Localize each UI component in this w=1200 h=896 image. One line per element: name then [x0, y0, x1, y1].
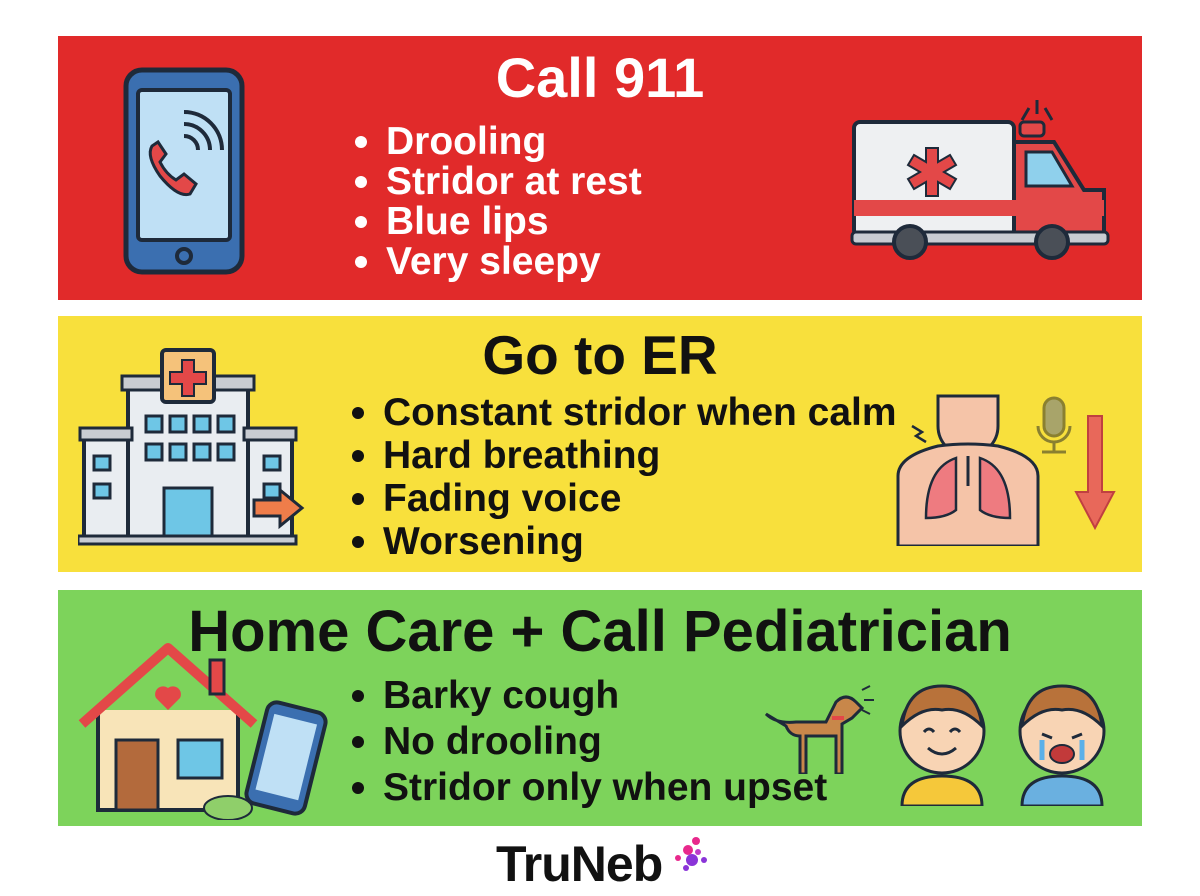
bullet list: ER signs	[352, 391, 897, 563]
bullet list: ER signs: Constant stridor when calm	[383, 391, 897, 434]
icon: house with phone	[78, 643, 328, 820]
bullet list: home care signs: Barky cough	[383, 674, 619, 717]
panel: home care	[58, 590, 1142, 826]
logo: TruNeb: TruNeb	[496, 836, 662, 892]
icon: happy and crying children	[898, 684, 1106, 806]
heading: Go to ER: Go to ER	[482, 324, 718, 386]
icon: chest with lungs, mic and down arrow	[896, 394, 1116, 546]
heading: Call 911: Call 911	[496, 46, 704, 109]
icon: hospital	[78, 348, 304, 546]
bullet list: 911 signs: Very sleepy	[386, 240, 601, 283]
bullet list: ER signs: Worsening	[383, 520, 584, 563]
bullet list: 911 signs	[355, 120, 642, 283]
icon: barking dog	[765, 685, 874, 774]
bullet list: 911 signs: Drooling	[386, 120, 546, 163]
panel: go to ER	[58, 316, 1142, 572]
heading: Home Care + Call Pediatrician: Home Care + Call Pediatrician	[188, 599, 1012, 664]
bullet list: ER signs: Fading voice	[383, 477, 621, 520]
panel: call 911	[58, 36, 1142, 300]
icon: ambulance	[850, 100, 1110, 260]
bullet list: home care signs	[352, 674, 827, 809]
bullet list: home care signs: Stridor only when upset	[383, 766, 827, 809]
bullet list: home care signs: No drooling	[383, 720, 602, 763]
icon: phone	[124, 68, 244, 274]
bullet list: ER signs: Hard breathing	[383, 434, 660, 477]
bullet list: 911 signs: Stridor at rest	[386, 160, 642, 203]
bullet list: 911 signs: Blue lips	[386, 200, 549, 243]
